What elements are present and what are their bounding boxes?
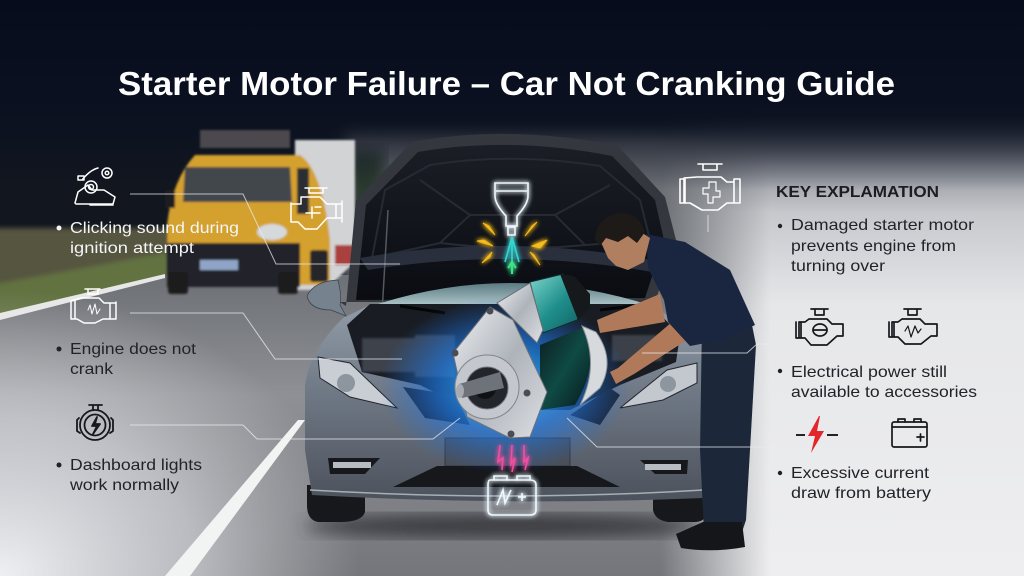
- explanation 3 text: [778, 465, 931, 502]
- tires: [307, 485, 709, 522]
- open hood: [340, 134, 676, 306]
- plate recess: [445, 438, 570, 466]
- car with open hood: [305, 134, 709, 522]
- symptom 3 text: [56, 457, 202, 494]
- symptom 2 text: [56, 341, 197, 378]
- arms: [597, 294, 690, 384]
- explanation 1 text: prevents engine from: [791, 238, 956, 255]
- main cylinder: [540, 328, 591, 410]
- icon: engine with minus: [796, 309, 843, 345]
- headlights: [318, 357, 397, 408]
- symptom 2 text: crank: [70, 361, 114, 378]
- callout lines: left: [130, 194, 460, 439]
- blue energy glow behind starter: [380, 297, 630, 473]
- engine bay: [347, 304, 680, 410]
- symptom 3 text: Dashboard lights: [70, 457, 202, 474]
- hood inner pattern: [372, 159, 650, 258]
- main housing: [453, 307, 547, 438]
- explanation 2 text: [778, 364, 977, 401]
- explanation 1 text: [778, 217, 975, 275]
- right ring: [580, 326, 607, 405]
- mechanic: [595, 213, 756, 550]
- shirt: [646, 234, 755, 346]
- explanation 1 text: Damaged starter motor: [791, 217, 975, 234]
- wipers: [400, 305, 640, 313]
- icon: stopwatch with bolt: [77, 405, 113, 440]
- bolts: [452, 308, 530, 438]
- car body: [305, 304, 708, 501]
- windshield: [378, 283, 646, 304]
- symptom 2 text: Engine does not: [70, 341, 197, 358]
- symptom 1 text: ignition attempt: [70, 240, 195, 257]
- symptom 1 text: Clicking sound during: [70, 220, 239, 237]
- shaft: [459, 372, 504, 398]
- icon: engine with pulse: [889, 309, 937, 344]
- top cylinder: [530, 274, 587, 333]
- explanation 3 text: Excessive current: [791, 465, 930, 482]
- trousers: [700, 315, 756, 532]
- starter motor illustration: [452, 274, 607, 438]
- hair: [595, 213, 645, 246]
- front plate: [455, 355, 519, 419]
- title: Starter Motor Failure – Car Not Cranking Guide: [118, 66, 895, 103]
- icon: engine warning outline: [71, 289, 116, 323]
- grille: [403, 387, 620, 425]
- symptom 1 text: [56, 220, 239, 257]
- side mirror: [307, 280, 346, 316]
- background vehicle: yellow van: [165, 130, 355, 294]
- icon: glowing battery with pink sparks: [488, 445, 536, 515]
- nose housing: [497, 283, 543, 343]
- callout lines: right: [567, 215, 778, 447]
- icon: red bolt current: [796, 416, 838, 453]
- explanation 2 text: Electrical power still: [791, 364, 947, 381]
- explanation 2 text: available to accessories: [791, 384, 977, 401]
- symptom 3 text: work normally: [69, 477, 179, 494]
- lower intake and fog lights: [393, 466, 620, 487]
- shoes: [676, 522, 745, 550]
- right panel: key explanation: [680, 164, 977, 502]
- explanation 1 text: turning over: [791, 258, 886, 275]
- icon: engine outline top: [680, 164, 740, 210]
- icon: glowing solenoid funnel with sparks: [477, 183, 547, 274]
- icon: engine on van: [291, 188, 342, 229]
- face: [600, 225, 650, 270]
- heading: KEY EXPLAMATION: [776, 184, 939, 201]
- left panel: symptoms: [56, 168, 342, 494]
- explanation 3 text: draw from battery: [791, 485, 931, 502]
- hood prop rod: [381, 210, 388, 330]
- icon: starter assembly: [75, 168, 115, 205]
- icon: battery: [892, 419, 927, 447]
